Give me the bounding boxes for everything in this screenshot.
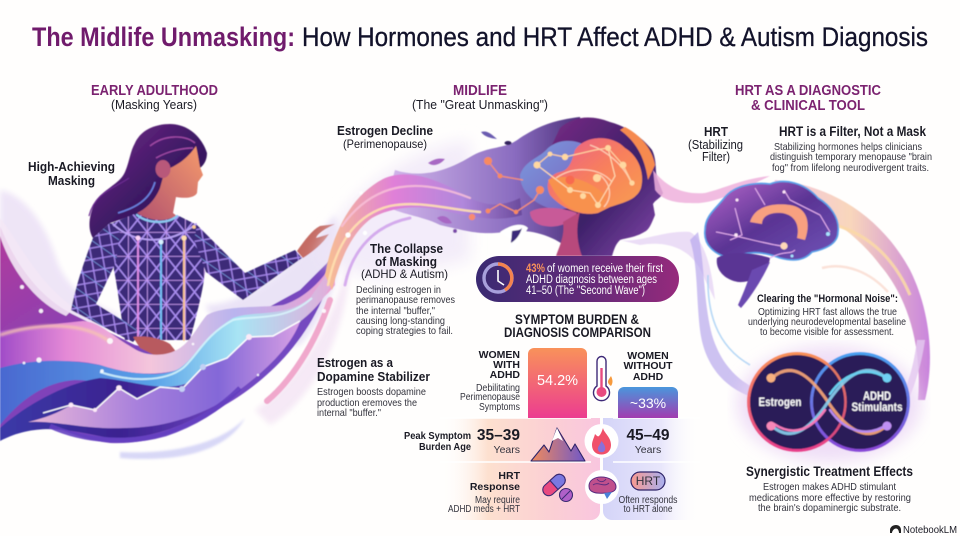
heading: midlife: (The "Great Unmasking") xyxy=(412,97,548,112)
icon: clock xyxy=(484,264,512,292)
cyan streak xyxy=(100,298,312,379)
row: peak symptom burden age: 35–39 xyxy=(477,427,520,444)
dopamine line chart xyxy=(43,321,300,413)
hand on ribbon xyxy=(297,224,335,258)
pink drip xyxy=(267,300,330,401)
NotebookLM logo: NotebookLM xyxy=(903,525,957,536)
text: often responds: Often responds xyxy=(618,495,678,506)
labels xyxy=(758,391,902,414)
bar: 33%: ~33% xyxy=(630,395,666,411)
stat text: ADHD diagnosis between ages xyxy=(526,274,657,286)
bottom lilac band xyxy=(28,321,300,428)
dark bottom edge xyxy=(50,388,240,440)
column: women without ADHD xyxy=(624,350,673,383)
inner arc xyxy=(750,204,808,240)
text: synergistic treatment effects: medications more effective by restoring xyxy=(749,492,911,504)
bar: 54.2%: 54.2% xyxy=(537,373,578,389)
sparkles xyxy=(20,285,326,376)
heading: symptom burden comparison: SYMPTOM BURDEN & xyxy=(515,312,639,327)
labels: Stimulants xyxy=(852,402,902,414)
icon: mountains xyxy=(531,428,585,461)
label: estrogen decline: Estrogen Decline xyxy=(337,124,433,138)
column: women without ADHD: WITHOUT xyxy=(624,360,673,372)
label: high-achieving masking xyxy=(28,160,115,188)
row: HRT response: ADHD meds + HRT xyxy=(448,504,520,515)
brain body xyxy=(705,182,838,260)
label: HRT stabilizing filter: (Stabilizing xyxy=(688,138,743,152)
blue band xyxy=(0,255,340,425)
text: HRT is a filter: fog" from lifelong neurodivergent traits. xyxy=(772,162,929,174)
text: collapse of masking: coping strategies to fail. xyxy=(356,325,453,337)
brain front lobe xyxy=(548,138,642,214)
stat pill xyxy=(476,256,679,302)
row: HRT response: Response xyxy=(470,481,520,493)
row: peak symptom burden age: Burden Age xyxy=(419,441,471,453)
white cut-ins in plume xyxy=(500,225,528,253)
brain folds xyxy=(556,145,632,207)
right inner highlights xyxy=(835,225,910,295)
neural network xyxy=(484,145,635,214)
left arm xyxy=(71,223,142,342)
label: high-achieving masking: High-Achieving xyxy=(28,160,115,174)
text: HRT is a filter: HRT is a Filter, Not a Mask xyxy=(779,124,926,139)
row: peak symptom burden age: Peak Symptom xyxy=(404,430,471,442)
icon: brain in circle xyxy=(585,470,619,504)
lower hand xyxy=(133,336,181,358)
column: women with ADHD: ADHD xyxy=(490,369,520,381)
glowing lattice lines xyxy=(113,215,196,345)
text: synergistic treatment effects: the brain's dopaminergic substrate. xyxy=(758,502,901,514)
right outer arc xyxy=(770,180,930,400)
face and neck xyxy=(137,146,203,222)
right lower strand xyxy=(862,340,925,450)
peach highlight xyxy=(0,326,110,342)
text: collapse of masking: perimanopause removes xyxy=(356,294,455,306)
row: HRT response xyxy=(448,470,521,515)
circle: estrogen xyxy=(748,354,846,450)
row: peak symptom burden age xyxy=(404,427,670,456)
left outer stream xyxy=(690,232,770,402)
text: HRT is a filter xyxy=(770,124,932,174)
text: collapse of masking: of Masking xyxy=(375,255,437,269)
brain veins xyxy=(716,188,830,258)
bar: 33% xyxy=(618,387,678,418)
stem xyxy=(738,262,770,308)
panel backgrounds xyxy=(440,418,700,520)
stat text xyxy=(526,263,664,297)
cerebellum xyxy=(530,208,577,227)
estrogen ring overlap xyxy=(748,354,846,450)
row: peak symptom burden age: 45–49 xyxy=(626,427,670,444)
stream from hand to head xyxy=(325,174,522,290)
labels: Estrogen xyxy=(758,397,802,409)
brain back lobe xyxy=(520,141,595,210)
plume behind head xyxy=(385,117,600,254)
column: women with ADHD: Perimenopause xyxy=(460,392,520,403)
row: peak symptom burden age: Years xyxy=(494,444,520,456)
row: peak symptom burden age: Years xyxy=(635,444,661,456)
text: estrogen as dopamine stabilizer: internal "buffer." xyxy=(317,407,381,419)
pink band xyxy=(0,262,335,375)
pale haze behind waves xyxy=(0,190,350,459)
heading: HRT tool xyxy=(735,83,881,114)
column: women with ADHD: Symptoms xyxy=(479,402,520,413)
text: often responds: to HRT alone xyxy=(624,504,673,515)
text: collapse of masking: (ADHD & Autism) xyxy=(361,267,448,281)
text: clearing hormonal noise: Clearing the "Hormonal Noise": xyxy=(757,293,898,305)
labels: ADHD xyxy=(863,391,891,403)
hair strand xyxy=(89,178,129,216)
text: collapse of masking xyxy=(356,242,455,337)
label: high-achieving masking: Masking xyxy=(48,174,95,188)
particles xyxy=(345,132,522,243)
label: HRT stabilizing filter xyxy=(688,125,743,164)
text: clearing hormonal noise: underlying neurodevelopmental baseline xyxy=(748,316,906,328)
sweater body xyxy=(110,213,205,340)
column: women without ADHD: WOMEN xyxy=(627,350,669,362)
text: HRT is a filter: Stabilizing hormones helps clinicians xyxy=(774,141,922,153)
HRT badge: HRT xyxy=(636,474,661,488)
text: collapse of masking: the internal "buffer," xyxy=(356,305,435,317)
heading: HRT tool: HRT AS A DIAGNOSTIC xyxy=(735,83,881,99)
text: synergistic treatment effects: Estrogen makes ADHD stimulant xyxy=(763,481,896,493)
HRT badge xyxy=(631,472,665,490)
icon: thermometer xyxy=(594,356,612,401)
heading: HRT tool: & CLINICAL TOOL xyxy=(751,98,865,114)
text: collapse of masking: The Collapse xyxy=(370,242,443,256)
row: HRT response: HRT xyxy=(498,470,521,482)
orange hair edge xyxy=(620,127,655,180)
title xyxy=(32,22,928,52)
ear xyxy=(156,160,170,178)
brain lower orange lobe xyxy=(548,177,605,212)
title: The Midlife Unmasking: xyxy=(32,22,295,52)
soft haze xyxy=(315,140,470,280)
label: estrogen decline: (Perimenopause) xyxy=(343,137,427,151)
text: synergistic treatment effects: Synergistic Treatment Effects xyxy=(746,464,913,479)
illustration: early adulthood woman and waves xyxy=(0,124,350,459)
text: often responds xyxy=(618,495,678,515)
illustration: right stream and HRT brain xyxy=(620,170,930,450)
column: women without ADHD: ADHD xyxy=(633,371,664,383)
woman: back hair xyxy=(89,124,207,238)
heading: symptom burden comparison xyxy=(504,312,651,340)
glow xyxy=(737,346,921,462)
stream highlights xyxy=(328,186,480,285)
head silhouette xyxy=(540,117,663,256)
column: women with ADHD: WITH xyxy=(493,359,520,371)
text: collapse of masking: causing long-standing xyxy=(356,315,445,327)
brain sparks xyxy=(734,190,830,258)
bar: 54.2% xyxy=(528,348,587,418)
comparison panel xyxy=(404,348,700,520)
row: HRT response: May require xyxy=(475,495,520,506)
column: women with ADHD: Debilitating xyxy=(476,383,520,394)
column: women with ADHD xyxy=(460,349,520,413)
text: estrogen as dopamine stabilizer: Dopamine Stabilizer xyxy=(317,370,430,384)
heading: symptom burden comparison: DIAGNOSIS COMPARISON xyxy=(504,325,651,340)
navy band xyxy=(0,322,300,441)
text: clearing hormonal noise xyxy=(748,293,906,338)
infinity strands xyxy=(766,370,892,434)
left inner strand xyxy=(708,275,750,365)
illustration: midlife head, brain and estrogen stream xyxy=(315,117,663,290)
heading: midlife xyxy=(412,83,548,112)
label: estrogen decline xyxy=(337,124,433,151)
icon: flame in circle xyxy=(584,424,618,458)
brain stem xyxy=(556,212,582,256)
text: clearing hormonal noise: to become visible for assessment. xyxy=(760,326,894,338)
text: estrogen as dopamine stabilizer xyxy=(317,356,430,419)
text: clearing hormonal noise: Optimizing HRT fast allows the true xyxy=(758,306,897,318)
text: estrogen as dopamine stabilizer: Estrogen as a xyxy=(317,356,394,370)
text: synergistic treatment effects xyxy=(746,464,913,514)
heading: midlife: MIDLIFE xyxy=(453,83,507,99)
text: HRT is a filter: distinguish temporary menopause "brain xyxy=(770,151,932,163)
right arm xyxy=(194,225,302,300)
stat text: of women receive their first xyxy=(547,263,664,275)
stat text: 41–50 (The "Second Wave") xyxy=(526,285,645,297)
white crescent xyxy=(0,218,74,316)
heading: early adulthood xyxy=(91,83,218,112)
label: HRT stabilizing filter: HRT xyxy=(704,125,728,139)
text: estrogen as dopamine stabilizer: production eremoves the xyxy=(317,397,417,409)
head-to-brain wave xyxy=(653,170,770,203)
icon: capsule and tablet xyxy=(540,472,572,502)
text: estrogen as dopamine stabilizer: Estrogen boosts dopamine xyxy=(317,386,426,398)
cerebellum xyxy=(717,253,770,282)
stat text: 43% xyxy=(526,263,545,275)
main purple wave xyxy=(0,226,340,443)
label: HRT stabilizing filter: Filter) xyxy=(702,150,730,164)
lower head stream xyxy=(620,232,715,300)
heading: early adulthood: (Masking Years) xyxy=(111,97,197,112)
heading: early adulthood: EARLY ADULTHOOD xyxy=(91,83,218,99)
circle: ADHD stimulants xyxy=(812,354,908,450)
venn: estrogen and ADHD stimulants xyxy=(737,346,921,462)
text: collapse of masking: Declining estrogen in xyxy=(356,284,441,296)
column: women with ADHD: WOMEN xyxy=(479,349,520,361)
